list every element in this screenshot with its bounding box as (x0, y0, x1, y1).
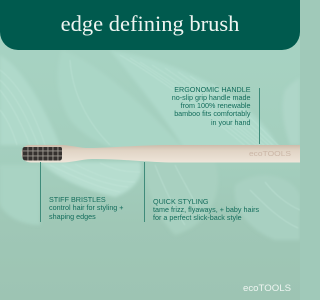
callout: stiff bristles: STIFF BRISTLES (49, 195, 106, 204)
callout: quick styling (153, 196, 259, 222)
callout: quick styling: for a perfect slick-back style (153, 213, 242, 222)
brand logo: ecoTOOLS (243, 283, 291, 294)
callout: stiff bristles (49, 195, 124, 221)
callout: ergonomic handle: in your hand (211, 118, 250, 127)
handle logo: ecoTOOLS (249, 151, 291, 158)
callout: ergonomic handle: bamboo fits comfortably (174, 109, 250, 118)
callout: stiff bristles: control hair for styling + (49, 203, 124, 212)
callout: quick styling: QUICK STYLING (153, 196, 209, 206)
callout line: quick styling (144, 162, 145, 222)
title: edge defining brush (61, 11, 239, 36)
callout: ergonomic handle: ERGONOMIC HANDLE (174, 84, 250, 94)
callout: ergonomic handle: from 100% renewable (181, 101, 250, 110)
callout: quick styling: tame frizz, flyaways, + baby hairs (153, 205, 259, 214)
callout: stiff bristles: shaping edges (49, 212, 96, 221)
callout line: handle (259, 88, 260, 144)
callout: ergonomic handle (172, 84, 250, 127)
title banner (0, 0, 300, 50)
callout line: bristles (40, 162, 41, 222)
callout: ergonomic handle: no-slip grip handle made (172, 93, 250, 102)
icon: bristles (22, 147, 62, 160)
